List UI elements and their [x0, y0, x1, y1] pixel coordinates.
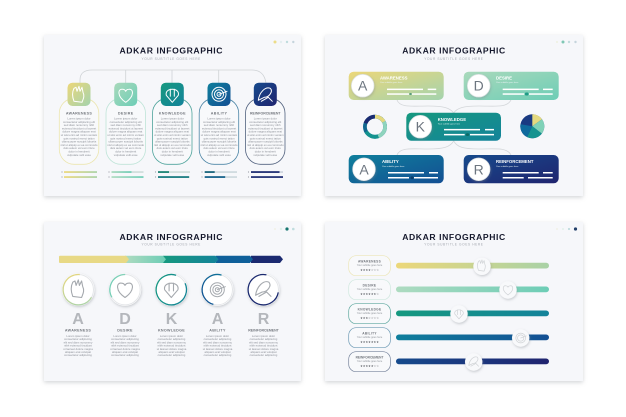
- body text: ut wisi enim ad minim veniam: [107, 133, 145, 137]
- connector lines: [80, 70, 266, 83]
- circle with hand and leaf icon: [246, 272, 281, 307]
- body text: vulputate velit esse: [67, 153, 91, 157]
- capsule: desire: [106, 83, 146, 164]
- card: awareness: [349, 72, 444, 100]
- body text: dolore magna aliquam erat: [109, 130, 143, 134]
- body text: ut wisi enim ad minim veniam: [201, 133, 238, 137]
- body text: ullamcorper suscipit lobortis: [248, 140, 283, 144]
- body text: quis nostrud exerci tation: [157, 136, 188, 140]
- step: ability: A: [212, 311, 224, 328]
- step: knowledge: KNOWLEDGE: [158, 328, 185, 332]
- step: knowledge: K: [166, 311, 178, 328]
- step: awareness: A: [72, 311, 84, 328]
- title: ADKAR INFOGRAPHIC: [120, 232, 222, 242]
- step: ability: [199, 271, 236, 357]
- row: desire: ★★★★★★☆: [360, 292, 379, 296]
- step: awareness: consectetur adipiscing: [64, 337, 92, 341]
- body text: euismod tincidunt ut laoreet: [155, 126, 190, 130]
- step: knowledge: aliquam erat volutpat: [159, 350, 185, 354]
- body text: sed diam nonummy nibh: [250, 123, 281, 127]
- body text: duis autem vel eum iriure: [157, 146, 188, 150]
- body text: quis nostrud exerci tation: [250, 136, 281, 140]
- body text: nisl ut aliquip ex ea commodo: [107, 143, 145, 147]
- body text: consectetur adipiscing elit: [156, 120, 189, 124]
- chart: donut: [361, 113, 389, 140]
- step: awareness: aliquam erat volutpat: [65, 350, 91, 354]
- row: ability: ★★★★★★★: [360, 340, 379, 344]
- card: knowledge: [406, 113, 501, 141]
- circle with target icon: [199, 271, 236, 308]
- letter badge A: A: [359, 161, 369, 177]
- body text: Lorem ipsum dolor: [114, 116, 137, 120]
- row: awareness: Your subtitle goes here: [357, 264, 383, 267]
- letter badge D: D: [474, 78, 484, 94]
- row: desire: Your subtitle goes here: [357, 288, 383, 291]
- step: desire: DESIRE: [117, 328, 133, 332]
- body text: duis autem vel eum iriure: [110, 146, 142, 150]
- body text: ut wisi enim ad minim veniam: [61, 133, 98, 137]
- step: reinforcement: nibh euismod tincidunt: [250, 344, 278, 348]
- label: KNOWLEDGE: [159, 112, 186, 116]
- body text: dolor in hendrerit: [162, 150, 183, 154]
- body text: Lorem ipsum dolor: [254, 116, 277, 120]
- label: AWARENESS: [66, 112, 92, 116]
- step: knowledge: [151, 270, 191, 357]
- step: desire: [104, 269, 146, 357]
- label: DESIRE: [118, 112, 134, 116]
- page dots: [556, 227, 577, 231]
- card: awareness: Your subtitle goes here: [380, 81, 403, 84]
- step: desire: aliquam erat volutpat: [112, 350, 138, 354]
- body text: dolor in hendrerit: [208, 150, 230, 154]
- row: reinforcement: ★★★★★☆☆: [360, 364, 379, 368]
- subtitle: YOUR SUBTITLE GOES HERE: [142, 57, 200, 61]
- step: knowledge: nibh euismod tincidunt: [158, 344, 186, 348]
- letter badge A: A: [358, 78, 368, 94]
- step: reinforcement: R: [258, 311, 270, 328]
- card: desire: [464, 72, 559, 100]
- step: knowledge: consectetur adipiscing: [158, 337, 186, 341]
- arrow band: [59, 256, 283, 263]
- step: knowledge: consectetur adipiscing: [158, 353, 186, 357]
- step: reinforcement: [246, 272, 281, 357]
- row: reinforcement: [349, 352, 549, 372]
- panel background: [44, 35, 301, 196]
- body text: ut wisi enim ad minim veniam: [247, 133, 284, 137]
- step: reinforcement: REINFORCEMENT: [248, 328, 280, 332]
- chart: pie: [520, 114, 544, 138]
- slider: [396, 353, 549, 371]
- step: ability: Lorem ipsum dolor: [206, 334, 229, 338]
- body text: nisl ut aliquip ex ea commodo: [154, 143, 191, 147]
- step: awareness: [58, 269, 99, 357]
- body text: dolor in hendrerit: [255, 150, 276, 154]
- capsule: reinforcement: [246, 83, 285, 164]
- panel: bottom right, sliders: [325, 222, 583, 381]
- icon: heart: [114, 83, 137, 106]
- body text: nisl ut aliquip ex ea commodo: [201, 143, 238, 147]
- step: knowledge: elit sed diam nonummy: [157, 340, 186, 344]
- step: ability: ABILITY: [209, 328, 226, 332]
- icon: hand and leaf: [254, 83, 277, 106]
- body text: euismod tincidunt ut laoreet: [202, 126, 236, 130]
- body text: quis nostrud exerci tation: [110, 136, 142, 140]
- step: awareness: ut laoreet dolore magna: [63, 347, 93, 351]
- step: awareness: AWARENESS: [65, 328, 91, 332]
- step: ability: aliquam erat volutpat: [205, 350, 231, 354]
- title: ADKAR INFOGRAPHIC: [402, 232, 505, 242]
- card: reinforcement: [464, 155, 559, 183]
- body text: dolore magna aliquam erat: [156, 130, 189, 134]
- row: awareness: ★★★★☆☆☆: [360, 268, 379, 272]
- connector lines: [397, 100, 511, 155]
- row: ability: Your subtitle goes here: [357, 336, 383, 339]
- body text: quis nostrud exerci tation: [203, 136, 235, 140]
- row: awareness: [349, 256, 549, 276]
- body text: dolor in hendrerit: [68, 150, 90, 154]
- body text: sed diam nonummy nibh: [64, 123, 95, 127]
- subtitle: YOUR SUBTITLE GOES HERE: [424, 243, 483, 247]
- letter badge K: K: [416, 119, 426, 135]
- panel background: [325, 222, 583, 381]
- body text: Lorem ipsum dolor: [161, 116, 184, 120]
- step: knowledge: Lorem ipsum dolor: [160, 334, 183, 338]
- body text: dolor in hendrerit: [115, 150, 136, 154]
- title: ADKAR INFOGRAPHIC: [402, 46, 505, 56]
- card: awareness: AWARENESS: [380, 76, 408, 80]
- body text: ullamcorper suscipit lobortis: [202, 140, 237, 144]
- step: reinforcement: aliquam erat volutpat: [251, 350, 277, 354]
- body text: ullamcorper suscipit lobortis: [155, 140, 190, 144]
- page dots: [274, 40, 294, 44]
- body text: dolore magna aliquam erat: [62, 130, 96, 134]
- body text: vulputate velit esse: [114, 153, 138, 157]
- step: desire: consectetur adipiscing: [111, 337, 139, 341]
- panel background: [325, 35, 583, 196]
- capsule: awareness: [59, 83, 99, 164]
- panel: top left, connected capsules: [44, 35, 301, 196]
- step: knowledge: ut laoreet dolore magna: [157, 347, 187, 351]
- step: awareness: consectetur adipiscing: [64, 353, 92, 357]
- subtitle: YOUR SUBTITLE GOES HERE: [142, 243, 200, 247]
- row: reinforcement: Your subtitle goes here: [357, 360, 383, 363]
- row: reinforcement: REINFORCEMENT: [356, 356, 383, 360]
- row: desire: DESIRE: [363, 283, 376, 287]
- panel background: [44, 222, 301, 381]
- step: reinforcement: ut laoreet dolore magna: [249, 347, 279, 351]
- card: knowledge: Your subtitle goes here: [438, 122, 461, 125]
- step: ability: ut laoreet dolore magna: [203, 347, 233, 351]
- row: desire: [349, 280, 549, 300]
- icon: hand: [68, 83, 90, 106]
- step: desire: consectetur adipiscing: [111, 353, 139, 357]
- label: REINFORCEMENT: [250, 112, 281, 116]
- title: ADKAR INFOGRAPHIC: [120, 46, 222, 56]
- body text: vulputate velit esse: [207, 153, 231, 157]
- card: ability: ABILITY: [382, 159, 399, 164]
- step: reinforcement: elit sed diam nonummy: [249, 340, 278, 344]
- row: knowledge: [349, 304, 549, 324]
- row: knowledge: ★★★☆☆☆☆: [360, 316, 379, 320]
- row: awareness: AWARENESS: [358, 260, 381, 264]
- step: awareness: elit sed diam nonummy: [64, 340, 93, 344]
- step: reinforcement: Lorem ipsum dolor: [252, 334, 275, 338]
- body text: ut wisi enim ad minim veniam: [154, 133, 191, 137]
- step: ability: nibh euismod tincidunt: [204, 344, 232, 348]
- body text: duis autem vel eum iriure: [63, 146, 95, 150]
- icon: balloon: [161, 83, 184, 106]
- card: ability: [349, 155, 444, 183]
- progress bars: [61, 171, 283, 178]
- card: knowledge: KNOWLEDGE: [438, 117, 466, 122]
- slider: [396, 329, 549, 347]
- body text: sed diam nonummy nibh: [110, 123, 141, 127]
- body text: euismod tincidunt ut laoreet: [62, 126, 96, 130]
- step: ability: elit sed diam nonummy: [203, 340, 232, 344]
- body text: dolore magna aliquam erat: [249, 130, 282, 134]
- body text: vulputate velit esse: [253, 153, 278, 157]
- panel: top right, letter cards: [325, 35, 583, 196]
- body text: dolore magna aliquam erat: [202, 130, 236, 134]
- row: knowledge: Your subtitle goes here: [357, 312, 383, 315]
- row: knowledge: KNOWLEDGE: [358, 308, 381, 312]
- circle with balloon icon: [151, 270, 191, 310]
- card: desire: DESIRE: [496, 76, 512, 80]
- slider: [396, 258, 549, 275]
- body text: ullamcorper suscipit lobortis: [108, 140, 144, 144]
- body text: Lorem ipsum dolor: [67, 116, 91, 120]
- body text: vulputate velit esse: [160, 153, 185, 157]
- subtitle: YOUR SUBTITLE GOES HERE: [424, 57, 483, 61]
- body text: consectetur adipiscing elit: [110, 120, 142, 124]
- row: ability: [349, 328, 549, 348]
- capsule: knowledge: [152, 83, 192, 164]
- step: awareness: nibh euismod tincidunt: [64, 344, 92, 348]
- body text: sed diam nonummy nibh: [204, 123, 235, 127]
- card: reinforcement: REINFORCEMENT: [496, 159, 534, 164]
- capsule: ability: [199, 83, 239, 164]
- step: awareness: Lorem ipsum dolor: [66, 334, 90, 338]
- body text: nisl ut aliquip ex ea commodo: [61, 143, 98, 147]
- body text: quis nostrud exerci tation: [63, 136, 95, 140]
- step: desire: elit sed diam nonummy: [111, 340, 140, 344]
- slider: [396, 305, 549, 323]
- body text: ullamcorper suscipit lobortis: [62, 140, 97, 144]
- body text: nisl ut aliquip ex ea commodo: [247, 143, 284, 147]
- step: reinforcement: consectetur adipiscing: [250, 337, 278, 341]
- body text: sed diam nonummy nibh: [157, 123, 188, 127]
- step: desire: ut laoreet dolore magna: [110, 347, 140, 351]
- card: ability: Your subtitle goes here: [382, 165, 405, 168]
- step: desire: nibh euismod tincidunt: [111, 344, 139, 348]
- card: reinforcement: Your subtitle goes here: [496, 165, 519, 168]
- body text: euismod tincidunt ut laoreet: [109, 126, 143, 130]
- row: ability: ABILITY: [362, 331, 377, 335]
- body text: Lorem ipsum dolor: [207, 116, 231, 120]
- step: desire: D: [119, 311, 131, 328]
- slider: [396, 281, 549, 299]
- step: ability: consectetur adipiscing: [204, 353, 232, 357]
- body text: duis autem vel eum iriure: [203, 146, 235, 150]
- step: ability: consectetur adipiscing: [204, 337, 232, 341]
- body text: consectetur adipiscing elit: [249, 120, 282, 124]
- card: desire: Your subtitle goes here: [496, 81, 519, 84]
- page dots: [274, 227, 295, 231]
- body text: duis autem vel eum iriure: [250, 146, 281, 150]
- letter badge R: R: [474, 161, 484, 177]
- label: ABILITY: [211, 112, 227, 116]
- body text: consectetur adipiscing elit: [63, 120, 95, 124]
- step: desire: Lorem ipsum dolor: [113, 334, 137, 338]
- circle with hand icon: [58, 269, 99, 310]
- step: reinforcement: consectetur adipiscing: [250, 353, 278, 357]
- body text: consectetur adipiscing elit: [203, 120, 235, 124]
- circle with heart icon: [104, 269, 146, 310]
- body text: euismod tincidunt ut laoreet: [248, 126, 283, 130]
- icon: target: [208, 83, 230, 106]
- page dots: [556, 40, 577, 44]
- panel: bottom left, arrow and circles: [44, 222, 301, 381]
